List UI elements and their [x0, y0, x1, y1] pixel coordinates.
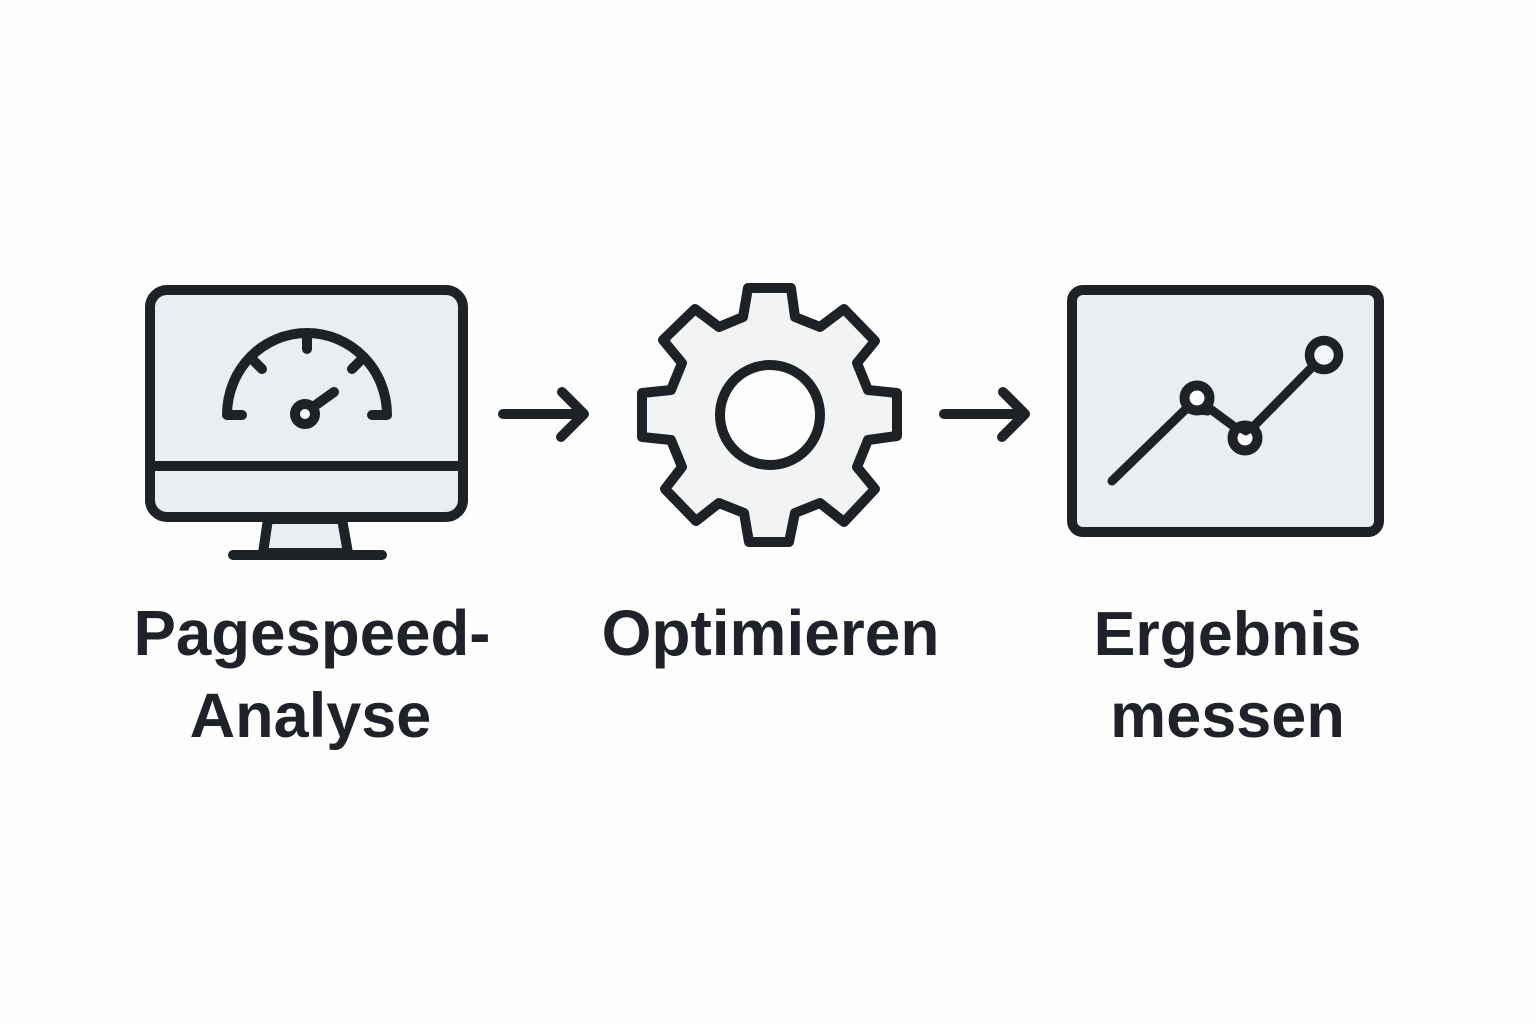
label: Ergebnis messen	[1094, 599, 1361, 751]
label: Ergebnis messen: messen	[1110, 681, 1345, 751]
icon: line chart panel	[1072, 290, 1379, 532]
icon: monitor with speedometer	[150, 290, 463, 555]
label: Pagespeed-Analyse: Analyse	[190, 681, 431, 751]
arrow: analysis to optimize	[503, 392, 584, 437]
arrow: optimize to result	[944, 392, 1025, 437]
label: Optimieren: Optimieren	[602, 597, 939, 669]
label: Ergebnis messen: Ergebnis	[1094, 599, 1361, 669]
label: Pagespeed-Analyse: Pagespeed-	[134, 598, 490, 669]
label: Pagespeed-Analyse	[134, 598, 490, 751]
icon: gear	[642, 288, 897, 542]
